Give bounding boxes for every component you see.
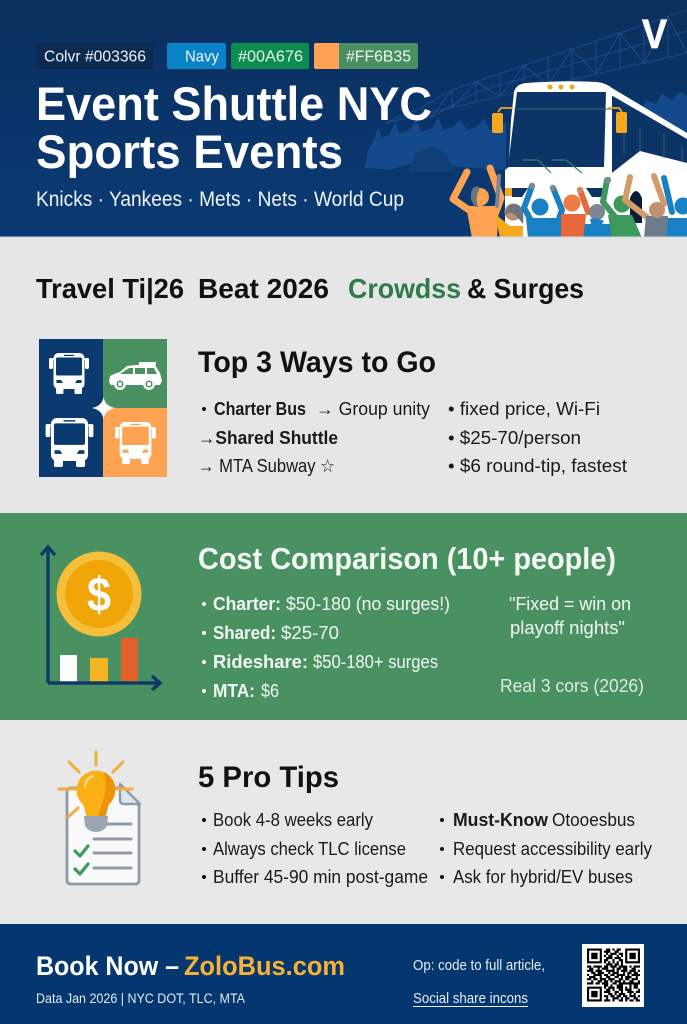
social link: Social share incons: [413, 991, 528, 1007]
fan: orange: [453, 168, 501, 238]
heading: travel tip: Crowdss: [348, 273, 461, 304]
icon: coin and bar chart: [41, 547, 160, 690]
stadium truss: [385, 10, 687, 123]
data source: Data Jan 2026 | NYC DOT, TLC, MTA: [36, 991, 245, 1006]
heading: 5 Pro Tips: [198, 761, 339, 794]
list: left tips: Book 4-8 weeks early: [213, 810, 373, 830]
list: right column: • fixed price, Wi-Fi: [448, 398, 600, 419]
title: Sports Events: [36, 125, 343, 178]
list: cost rows: MTA:: [213, 680, 255, 701]
list: cost rows: $50-180+ surges: [313, 651, 438, 672]
list: left column: → MTA Subway ☆: [198, 456, 335, 476]
panel: footer: [0, 924, 687, 1024]
crowd silhouettes: [365, 92, 687, 170]
list: cost rows: Charter:: [213, 593, 281, 614]
list: cost rows: $25-70: [281, 622, 339, 643]
bus side: [505, 88, 687, 237]
note: Real 3 cors (2026): [500, 676, 644, 696]
panel: cost comparison: [0, 513, 687, 720]
list: left column: →Shared Shuttle: [198, 428, 338, 448]
call to action: ZoloBus.com: [184, 951, 345, 981]
list: right tips: Request accessibility early: [453, 839, 652, 859]
QR code: [582, 944, 644, 1007]
color chip: Colvr: [36, 43, 153, 69]
panel: header banner: [0, 0, 687, 238]
color chip: Navy: Navy: [185, 48, 219, 66]
list: left tips: Buffer 45-90 min post-game: [213, 867, 428, 887]
heading: Top 3 Ways to Go: [198, 346, 436, 379]
section backgrounds: [0, 238, 687, 924]
heading: travel tip: Travel Ti|26: [36, 273, 184, 304]
list: cost rows: $6: [261, 680, 279, 701]
fan: grey: [625, 176, 668, 238]
callout: quote: playoff nights": [510, 618, 625, 638]
call to action: Book Now –: [36, 951, 179, 981]
panel: 5 pro tips: [59, 752, 652, 887]
list: cost rows: $50-180 (no surges!): [286, 593, 450, 614]
color chip: green: [231, 43, 309, 69]
heading: travel tip: [36, 273, 584, 304]
illustration: bus and fans: [453, 81, 687, 238]
list: right column: • $6 round-tip, fastest: [448, 455, 627, 476]
fan: red: [561, 187, 588, 238]
list: left column: [198, 399, 430, 476]
list: left tips: Always check TLC license: [213, 839, 406, 859]
list: cost rows: Rideshare:: [213, 651, 308, 672]
icon: car: [109, 362, 162, 390]
icon: coin and bar chart: $: [87, 569, 111, 622]
list: right tips: Must-Know: [453, 810, 549, 830]
fan: blue center: [583, 204, 613, 238]
callout: quote: [509, 594, 631, 638]
icon: light bulb and checklist: [59, 752, 140, 884]
icon: white logo mark: V: [642, 11, 668, 57]
subtitle: Knicks · Yankees · Mets · Nets · World Cup: [36, 187, 404, 211]
color chip: green: #00A676: [238, 48, 303, 66]
panel: top 3 ways to go: [39, 339, 627, 477]
list: left column: → Group unity: [316, 399, 430, 419]
fan: blue right: [664, 178, 687, 238]
fan: green: [603, 177, 642, 238]
list: left column: Charter Bus: [214, 399, 306, 419]
color chip: Navy: [167, 43, 226, 69]
heading: Cost Comparison (10+ people): [198, 541, 616, 576]
list: right column: • $25-70/person: [448, 427, 581, 448]
fan: blue left: [524, 183, 563, 238]
call to action: [36, 951, 345, 981]
heading: travel tip: Beat 2026: [198, 273, 329, 304]
title: [36, 77, 432, 178]
icon: transport grid: [39, 339, 167, 477]
list: left tips: [202, 810, 428, 887]
list: right tips: [440, 810, 652, 887]
list: cost rows: [202, 593, 450, 701]
list: right column: [448, 398, 627, 476]
bus front: [505, 81, 612, 237]
list: right tips: Ask for hybrid/EV buses: [453, 867, 633, 887]
color chip: orange: #FF6B35: [346, 48, 411, 66]
QR caption: Op: code to full article,: [413, 958, 545, 974]
title: Event Shuttle NYC: [36, 77, 432, 130]
list: cost rows: Shared:: [213, 622, 276, 643]
bus mirrors: [492, 108, 627, 133]
color chip: Colvr: Colvr #003366: [44, 48, 146, 66]
callout: quote: "Fixed = win on: [509, 594, 631, 614]
heading: travel tip: & Surges: [467, 273, 584, 304]
color chip: orange: [314, 43, 418, 69]
list: right tips: Otooesbus: [552, 810, 635, 830]
fan: yellow: [495, 176, 523, 238]
